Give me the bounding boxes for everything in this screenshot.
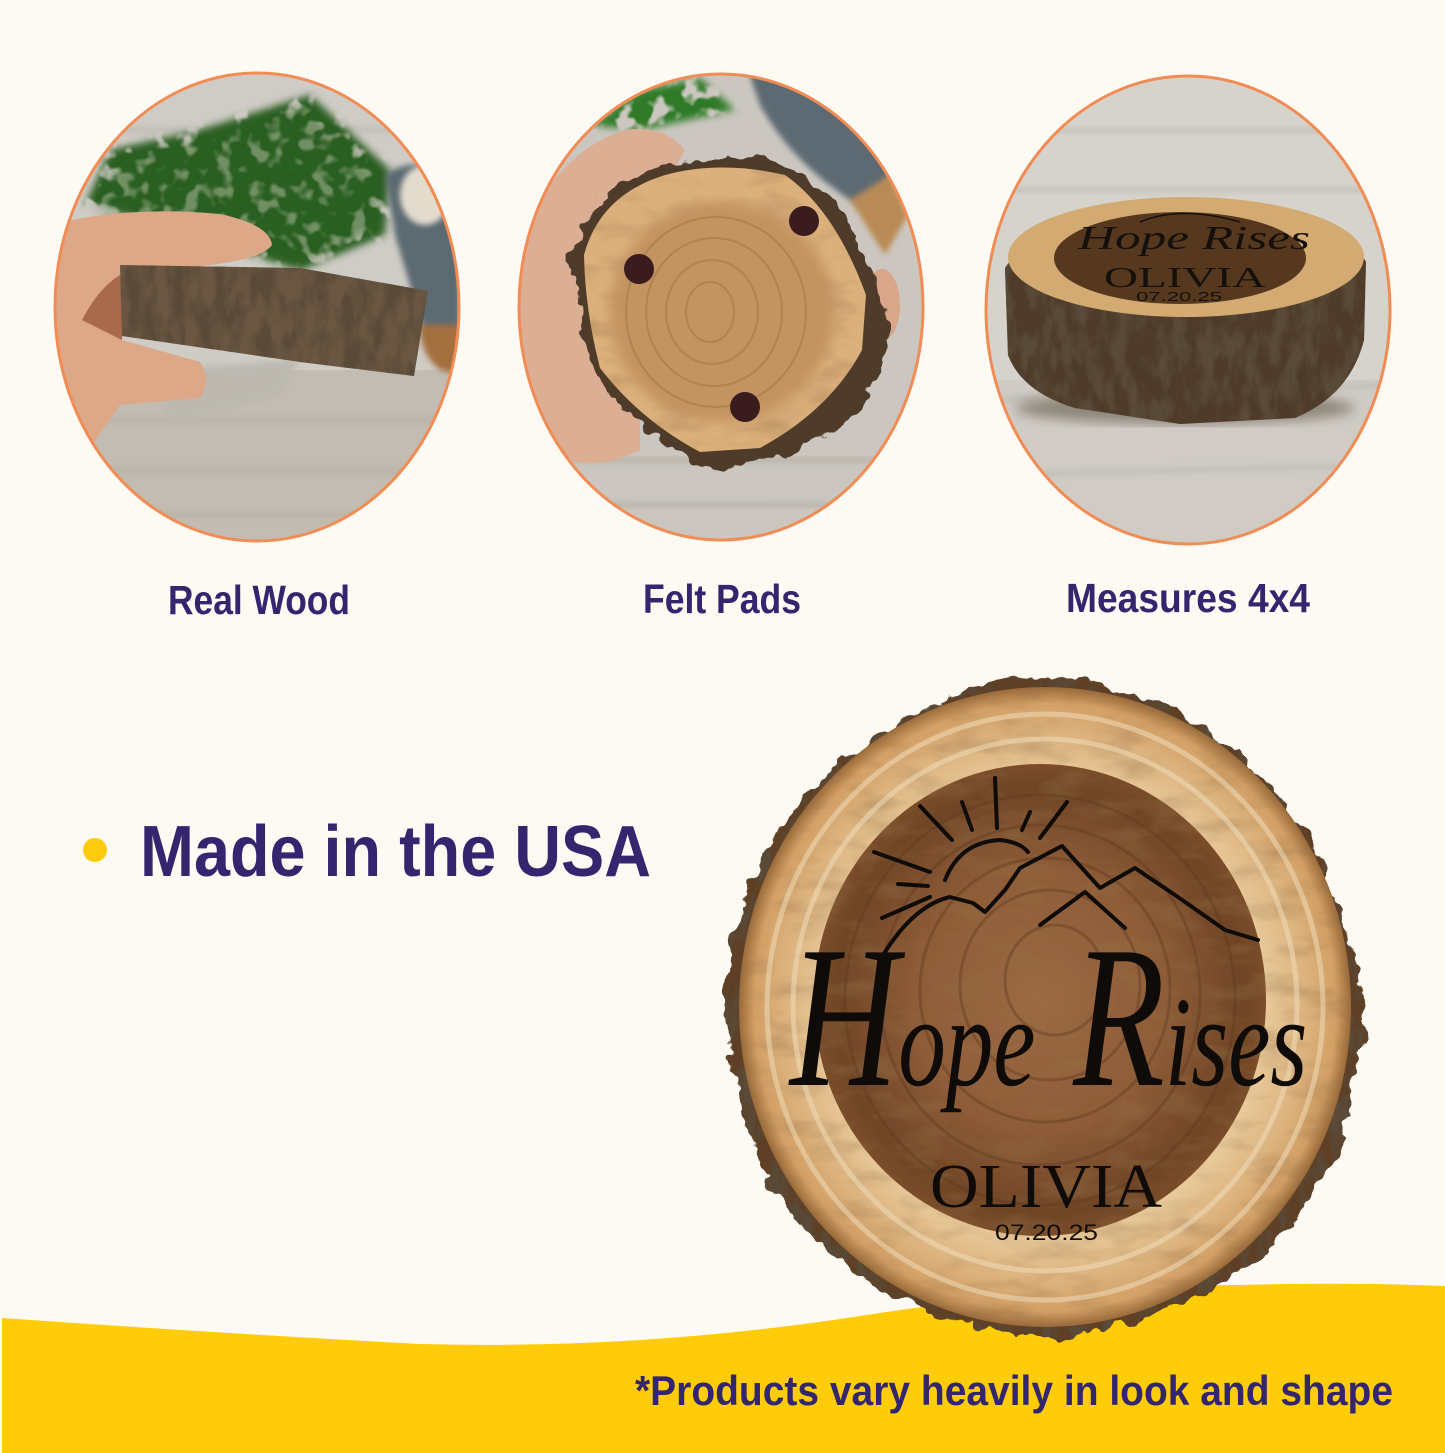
felt pad bottom (730, 392, 760, 422)
sapwood (739, 687, 1351, 1327)
engraving: OLIVIA: OLIVIA (930, 1153, 1162, 1221)
heartwood (814, 764, 1266, 1236)
caption: Real Wood: Real Wood (168, 577, 350, 623)
engraving: Hope Rises: Hope Rises (788, 904, 1307, 1129)
mini engraving: date: 07.20.25 (1136, 289, 1222, 304)
photo: real wood, side view in hand (50, 70, 465, 550)
bullet dot (83, 838, 107, 862)
caption: Measures 4x4: Measures 4x4 (1066, 575, 1310, 621)
yellow wave footer (2, 1284, 1445, 1453)
mini engraving: OLIVIA: OLIVIA (1104, 262, 1266, 294)
mini engraving: Hope Rises: Hope Rises (1076, 220, 1310, 257)
photo: felt pads on coaster underside (515, 70, 930, 550)
photo: engraved coaster measuring 4x4 (980, 70, 1395, 550)
felt pad left (624, 254, 654, 284)
feature text: Made in the USA (140, 812, 651, 892)
bark edge (725, 675, 1362, 1337)
large engraved wood coaster (725, 675, 1362, 1337)
feature bullet: Made in the USA (83, 812, 651, 892)
engraving: sun and mountains (874, 778, 1258, 952)
footnote: *Products vary heavily in look and shape (635, 1367, 1393, 1414)
engraving: date: 07.20.25 (995, 1220, 1098, 1245)
caption: Felt Pads: Felt Pads (643, 576, 801, 622)
felt pad top right (789, 206, 819, 236)
